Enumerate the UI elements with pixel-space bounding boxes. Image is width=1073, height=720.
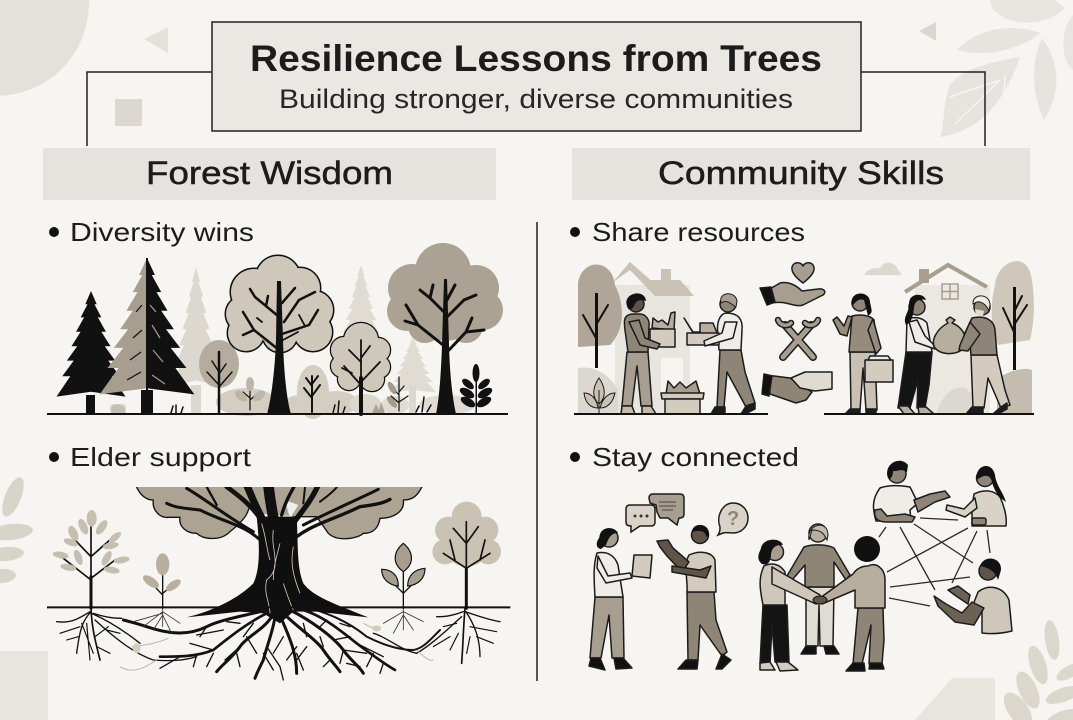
- title: Resilience Lessons from Trees: [250, 38, 822, 79]
- panel: community skills header: [572, 148, 1030, 200]
- subtitle: Building stronger, diverse communities: [279, 84, 793, 114]
- root networks of young trees: [57, 608, 500, 670]
- groceries box, right person: [684, 318, 737, 346]
- man gesturing: [657, 525, 731, 669]
- right tree: [992, 261, 1034, 370]
- frame lines behind title: [87, 72, 985, 146]
- cloud: [864, 263, 902, 275]
- outlined small tree: [331, 323, 390, 414]
- big solid tree: [387, 243, 503, 414]
- illustration: share resources: [574, 261, 1034, 414]
- speech bubble: dots: [626, 505, 655, 532]
- bullet: stay connected: Stay connected: [592, 442, 799, 472]
- icon: crossed wrenches: [778, 320, 818, 357]
- left tree: [578, 264, 622, 368]
- elder trunk: [187, 517, 368, 623]
- woman with tablet: [589, 528, 652, 670]
- young tree with tan leaves: [52, 510, 130, 608]
- person: lower man: [934, 558, 1012, 634]
- young tree with round crown: [432, 502, 501, 608]
- two-tone conifer: [100, 258, 194, 414]
- network lines: [879, 518, 990, 606]
- icon: handshake: [762, 372, 832, 403]
- person giving box, left: [621, 293, 656, 414]
- panel: forest wisdom header: Forest Wisdom: [146, 155, 393, 191]
- panel: forest wisdom header: [43, 148, 496, 200]
- icon: heart over open hand: [760, 263, 825, 306]
- older man with sack: [959, 296, 1010, 414]
- ground line: [47, 604, 510, 610]
- panel: community skills header: Community Skills: [658, 155, 944, 191]
- right bushes: [937, 369, 1032, 413]
- small oval tree: [199, 340, 239, 413]
- faint background conifers: [172, 265, 436, 413]
- centre divider: [536, 222, 538, 681]
- middle person in group: [787, 524, 850, 654]
- person receiving box, right: [711, 294, 755, 414]
- share ground lines: [574, 413, 1034, 415]
- woman with sack: [898, 295, 935, 414]
- outlined sapling: [382, 543, 425, 608]
- sapling: [141, 553, 183, 608]
- title box: [212, 22, 861, 131]
- woman with bag: [833, 293, 893, 414]
- person: right woman: [946, 466, 1006, 526]
- speech bubble: question: ?: [727, 508, 739, 530]
- left bush and plant: [578, 367, 618, 414]
- person: top man: [873, 461, 950, 522]
- bark highlights: [262, 523, 300, 613]
- icon: black fern: [458, 364, 494, 413]
- illustration: elder tree and roots: [47, 483, 510, 680]
- bullet: share resources: Share resources: [592, 217, 805, 247]
- left house: [612, 262, 694, 413]
- box of goods on the ground: [661, 381, 704, 414]
- bullet: diversity wins: Diversity wins: [70, 217, 254, 247]
- speech bubble: question: [718, 503, 748, 535]
- speech bubble: lines: [649, 494, 684, 525]
- illustration: diverse forest: [47, 243, 508, 419]
- groceries box, left person: [629, 312, 675, 349]
- low bushes: [110, 365, 475, 419]
- woman in group: [758, 540, 821, 671]
- small plants: [111, 376, 431, 413]
- curly-haired person in group: [820, 536, 885, 671]
- outlined round tree: [226, 256, 333, 414]
- forest ground line: [47, 413, 508, 415]
- illustration: stay connected: [589, 461, 1012, 671]
- black conifer: [56, 291, 126, 414]
- elder canopy and branches: [136, 487, 422, 541]
- elder roots: [123, 607, 440, 680]
- clasped hands: [813, 596, 827, 604]
- right house: [905, 265, 990, 413]
- sack: [933, 317, 966, 354]
- bullet: elder support: Elder support: [70, 442, 252, 472]
